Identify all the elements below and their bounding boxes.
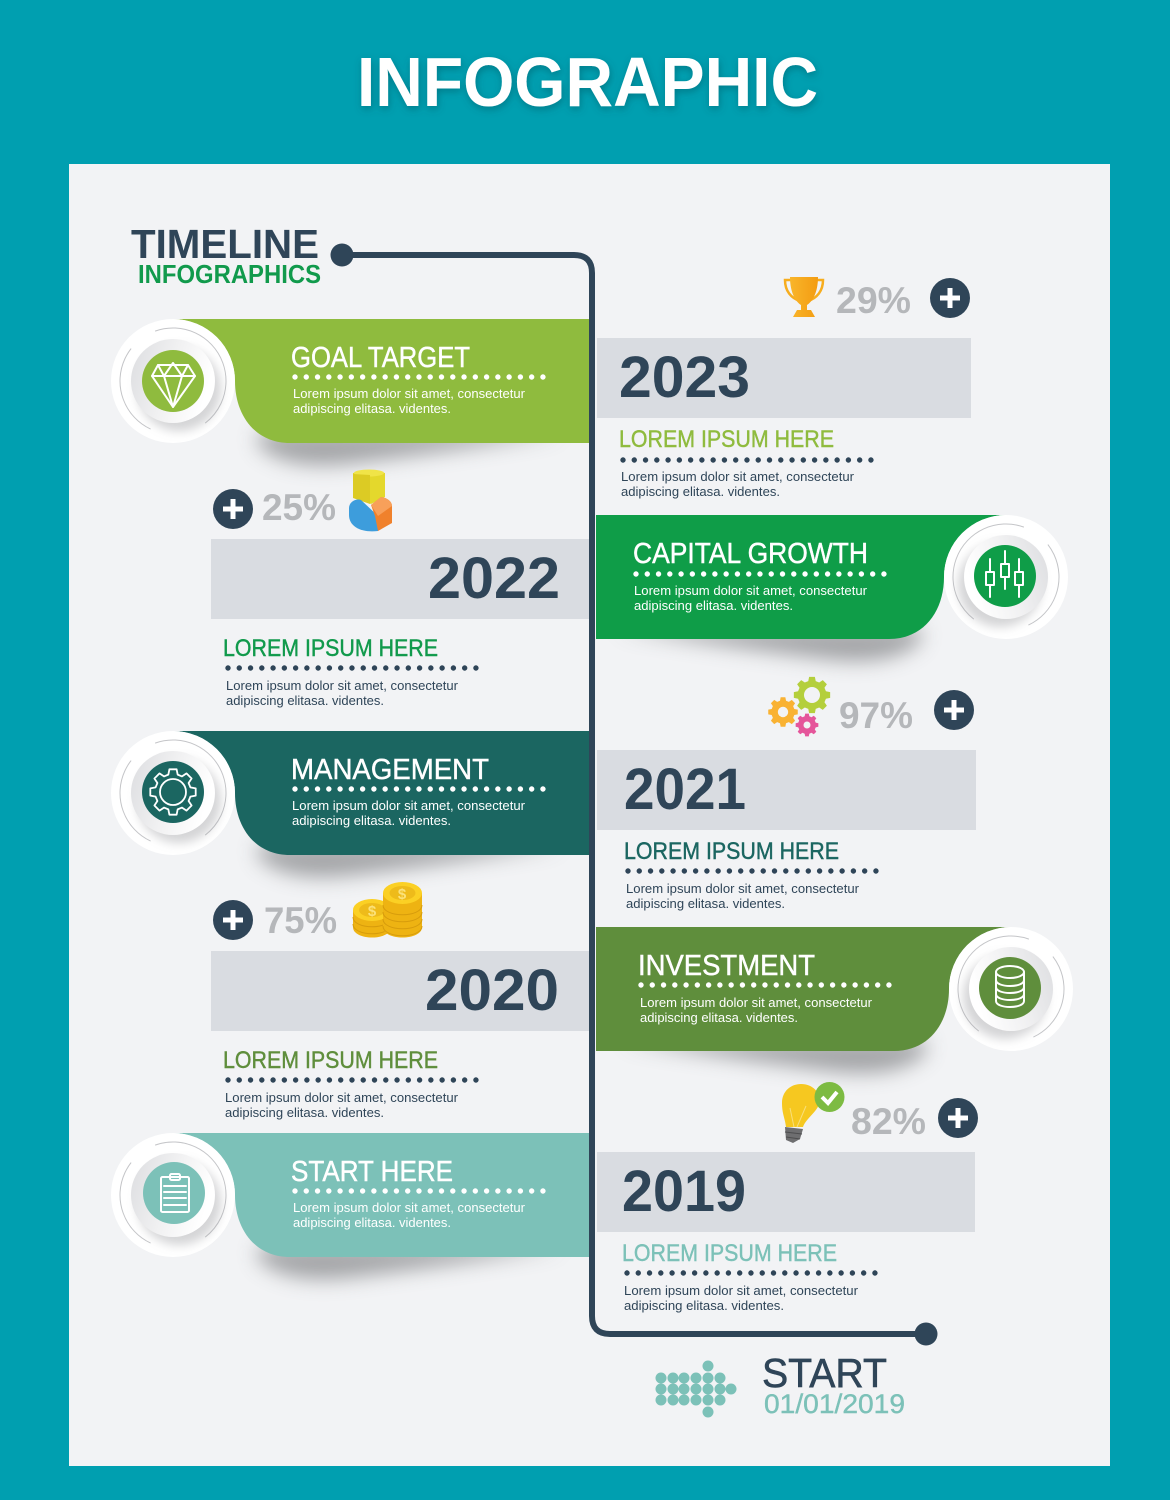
year bar 2022: 2022 <box>428 546 560 611</box>
stat 75% <box>213 882 422 941</box>
banner: investment <box>596 919 1081 1073</box>
heading: timeline infographics <box>131 221 321 289</box>
icon: clipboard <box>161 1174 189 1212</box>
banner: investment: Lorem ipsum dolor sit amet, consectetur <box>640 996 872 1010</box>
start label <box>656 1350 905 1419</box>
banner: capital growth: Lorem ipsum dolor sit amet, consectetur <box>634 584 867 598</box>
banner: investment: adipiscing elitasa. videntes. <box>640 1011 798 1025</box>
stat 97% <box>768 677 974 736</box>
year bar 2020 <box>211 951 589 1031</box>
text block 2022: adipiscing elitasa. videntes. <box>226 694 384 708</box>
icon: coins: $ <box>398 886 407 903</box>
icon: diamond <box>152 363 195 407</box>
icon: trophy <box>785 277 823 317</box>
year bar 2021: 2021 <box>624 757 746 822</box>
banner: start here <box>103 1125 589 1279</box>
banner: management <box>103 723 589 877</box>
text block 2022 <box>223 635 476 708</box>
banner: management: adipiscing elitasa. videntes. <box>292 814 451 828</box>
banner: goal target: adipiscing elitasa. videntes. <box>293 402 451 416</box>
banner: investment: INVESTMENT <box>638 950 815 982</box>
timeline line <box>330 244 938 1346</box>
banner: goal target: GOAL TARGET <box>291 342 470 374</box>
icon: database <box>996 966 1024 1007</box>
text block 2019: Lorem ipsum dolor sit amet, consectetur <box>624 1284 858 1298</box>
stat 25%: 25% <box>262 487 336 528</box>
text block 2023: adipiscing elitasa. videntes. <box>621 485 780 499</box>
banner: goal target: Lorem ipsum dolor sit amet, consectetur <box>293 387 525 401</box>
text block 2020: LOREM IPSUM HERE <box>223 1047 438 1074</box>
text block 2023: LOREM IPSUM HERE <box>619 426 834 453</box>
banner: capital growth: adipiscing elitasa. videntes. <box>634 599 793 613</box>
icon: coins <box>353 882 422 938</box>
text block 2021 <box>624 838 876 911</box>
heading: timeline infographics: INFOGRAPHICS <box>138 259 321 289</box>
banner: management: MANAGEMENT <box>291 754 489 786</box>
year bar 2019: 2019 <box>622 1159 746 1224</box>
heading: timeline infographics: TIMELINE <box>131 221 319 267</box>
text block 2022: Lorem ipsum dolor sit amet, consectetur <box>226 679 458 693</box>
text block 2019 <box>622 1240 875 1313</box>
year bar 2021 <box>597 750 976 830</box>
text block 2020: adipiscing elitasa. videntes. <box>225 1106 384 1120</box>
banner: start here: adipiscing elitasa. videntes. <box>293 1216 451 1230</box>
icon: gear <box>150 769 196 815</box>
banner: capital growth <box>596 507 1076 661</box>
banner: start here: Lorem ipsum dolor sit amet, consectetur <box>293 1201 525 1215</box>
icon: pie chart <box>349 470 392 531</box>
year bar 2022 <box>211 539 589 619</box>
stat 25% <box>213 470 392 531</box>
text block 2021: Lorem ipsum dolor sit amet, consectetur <box>626 882 859 896</box>
text block 2023: Lorem ipsum dolor sit amet, consectetur <box>621 470 854 484</box>
year bar 2023: 2023 <box>619 345 750 410</box>
banner: goal target <box>103 311 589 465</box>
year bar 2023 <box>597 338 971 418</box>
icon: coins: $ <box>368 903 377 920</box>
text block 2021: LOREM IPSUM HERE <box>624 838 839 865</box>
text block 2021: adipiscing elitasa. videntes. <box>626 897 785 911</box>
text block 2019: LOREM IPSUM HERE <box>622 1240 837 1267</box>
title: INFOGRAPHIC <box>357 43 818 121</box>
main panel <box>69 164 1110 1466</box>
text block 2023 <box>619 426 871 499</box>
icon: dotted arrow <box>656 1360 736 1418</box>
text block 2022: LOREM IPSUM HERE <box>223 635 438 662</box>
year bar 2020: 2020 <box>425 958 559 1023</box>
stat 97%: 97% <box>839 695 913 736</box>
start label: START <box>762 1350 887 1396</box>
stat 75%: 75% <box>264 900 337 941</box>
icon: gears <box>768 677 830 736</box>
banner: management: Lorem ipsum dolor sit amet, consectetur <box>292 799 525 813</box>
stat 29%: 29% <box>836 280 911 321</box>
banner: capital growth: CAPITAL GROWTH <box>633 538 868 570</box>
icon: light bulb with check <box>782 1082 844 1143</box>
year bar 2019 <box>597 1152 975 1232</box>
stat 82%: 82% <box>851 1101 926 1142</box>
text block 2020 <box>223 1047 476 1120</box>
stat 29% <box>785 277 970 321</box>
text block 2019: adipiscing elitasa. videntes. <box>624 1299 784 1313</box>
stat 82% <box>782 1082 978 1143</box>
start label: 01/01/2019 <box>764 1389 905 1419</box>
text block 2020: Lorem ipsum dolor sit amet, consectetur <box>225 1091 458 1105</box>
icon: sliders <box>986 551 1023 597</box>
banner: start here: START HERE <box>291 1156 453 1188</box>
